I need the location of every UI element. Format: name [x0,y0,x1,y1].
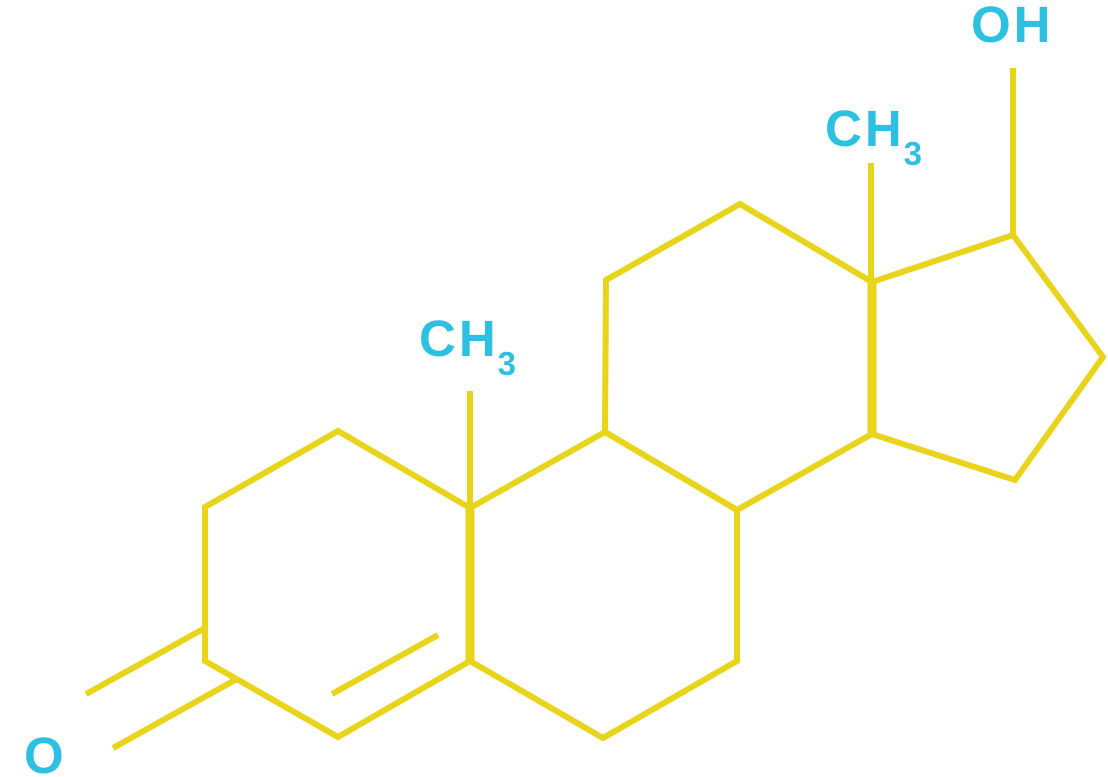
methyl bond 2 [868,163,874,282]
label: CH3 lower: CH [419,310,499,367]
label: CH3 upper: 3 [904,135,925,172]
label: CH3 lower: 3 [498,345,519,382]
methyl bond 1 [467,391,473,508]
ring A [205,431,470,737]
label: CH3 upper: CH [825,100,905,157]
hydroxyl bond [1010,68,1016,235]
carbonyl double bond [86,628,235,748]
shared bond A/B [466,508,474,661]
ring C [605,204,872,510]
shared bond C/D [868,282,876,434]
ring D [872,235,1103,480]
ring B [470,432,737,738]
